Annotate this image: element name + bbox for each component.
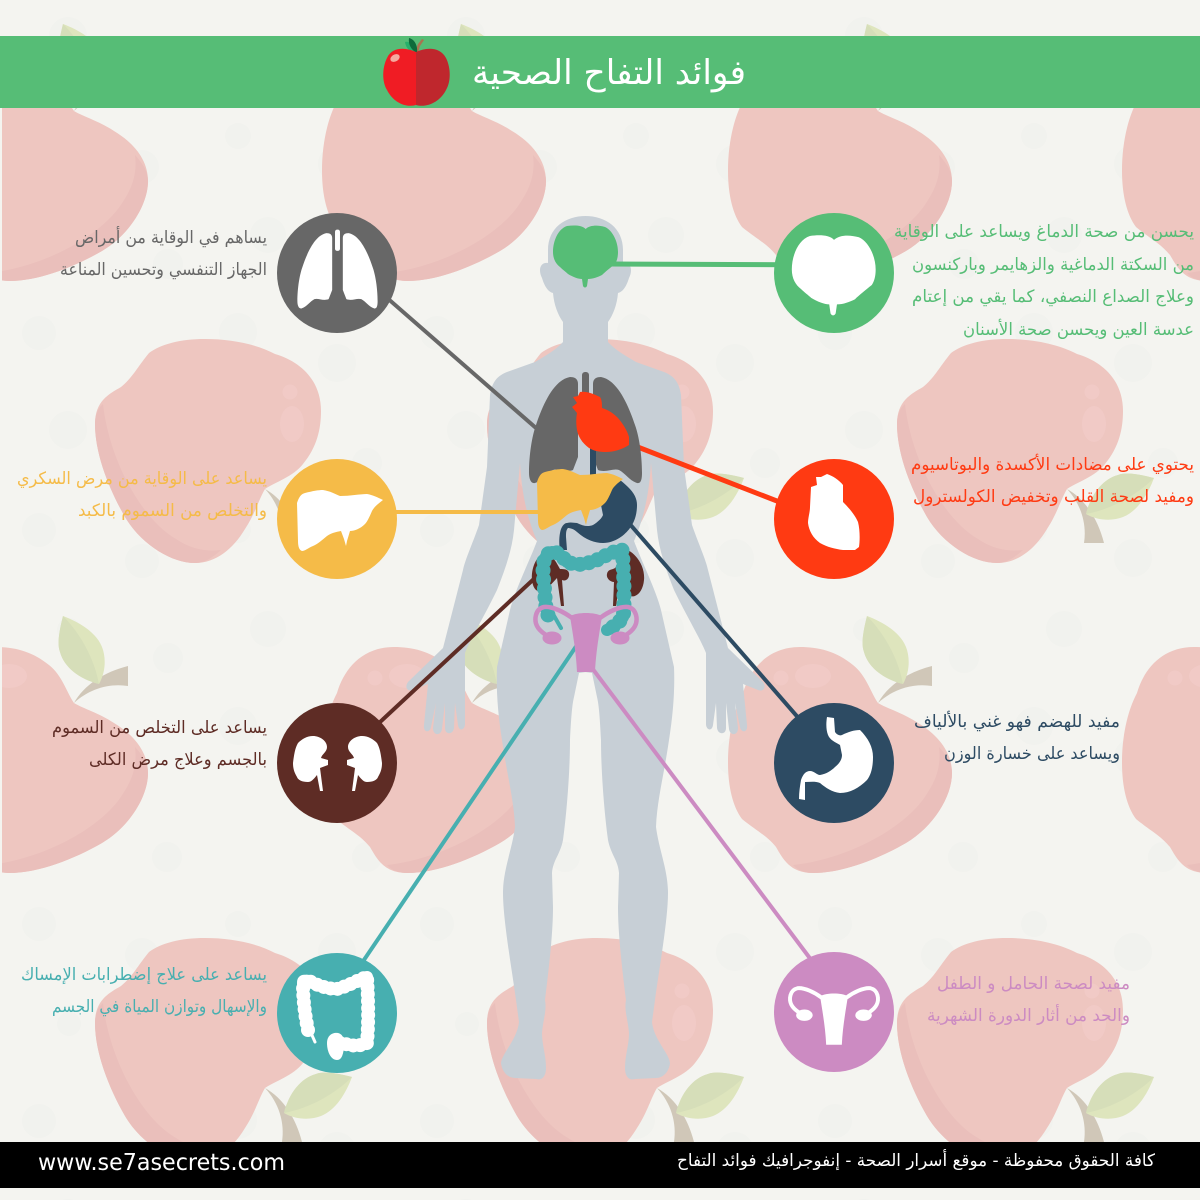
organ: lungs	[529, 372, 642, 483]
text: lungs: يساهم في الوقاية من أمراض	[75, 226, 267, 248]
text: lungs: الجهاز التنفسي وتحسين المناعة	[60, 260, 267, 280]
human body silhouette	[406, 216, 765, 1079]
icon: kidneys	[277, 703, 397, 823]
panel: colon benefit	[21, 953, 397, 1073]
panel: liver benefit	[17, 459, 397, 579]
icon: stomach	[774, 703, 894, 823]
connector: heart	[625, 442, 800, 510]
organ: kidneys	[532, 550, 644, 606]
text: heart: يحتوي على مضادات الأكسدة والبوتاسيوم	[911, 454, 1194, 475]
icon: lungs	[277, 213, 397, 333]
footer credits: كافة الحقوق محفوظة - موقع أسرار الصحة - إنفوجرافيك فوائد التفاح	[677, 1149, 1156, 1171]
organ: colon	[543, 550, 624, 630]
panel: lungs benefit	[60, 213, 397, 333]
panel: stomach benefit	[774, 703, 1120, 823]
text: heart: ومفيد لصحة القلب وتخفيض الكولسترول	[913, 487, 1194, 507]
text: lungs	[60, 226, 267, 280]
text: stomach: مفيد للهضم فهو غني بالألياف	[914, 711, 1120, 732]
text: colon: والإسهال وتوازن المياة في الجسم	[52, 997, 267, 1017]
connector: colon	[347, 645, 577, 985]
organ: heart	[572, 392, 629, 452]
text: liver	[17, 469, 267, 521]
connector: lungs	[370, 283, 536, 428]
organ: stomach	[559, 480, 637, 550]
text: stomach	[914, 711, 1120, 764]
organ: uterus	[535, 607, 637, 672]
panel: uterus benefit	[774, 952, 1130, 1072]
text: kidneys: يساعد على التخلص من السموم	[52, 718, 267, 738]
icon: liver	[277, 459, 397, 579]
text: liver: يساعد على الوقاية من مرض السكري	[17, 469, 267, 489]
text: brain: عدسة العين ويحسن صحة الأسنان	[963, 319, 1194, 340]
text: brain: يحسن من صحة الدماغ ويساعد على الوقاية	[894, 222, 1194, 242]
text: brain	[894, 222, 1194, 340]
icon: colon	[277, 953, 397, 1073]
text: heart	[911, 454, 1194, 507]
text: uterus: مفيد لصحة الحامل و الطفل	[937, 974, 1130, 994]
icon: heart	[774, 459, 894, 579]
connector: kidneys	[350, 577, 536, 750]
text: colon	[21, 965, 267, 1017]
text: uterus	[927, 974, 1130, 1026]
organs inside the body	[529, 225, 644, 672]
text: kidneys: بالجسم وعلاج مرض الكلى	[89, 750, 267, 770]
connector: liver	[337, 510, 545, 514]
icon: uterus	[774, 952, 894, 1072]
icon: red apple	[383, 38, 450, 106]
connector: uterus	[592, 668, 830, 985]
text: stomach: ويساعد على خسارة الوزن	[944, 744, 1120, 764]
header band	[0, 36, 1200, 108]
panel: heart benefit	[774, 454, 1194, 579]
text: brain: من السكتة الدماغية والزهايمر وباركنسون	[912, 255, 1194, 275]
title: فوائد التفاح الصحية	[472, 53, 746, 93]
footer website: www.se7asecrets.com	[38, 1150, 285, 1176]
text: uterus: والحد من أثار الدورة الشهرية	[927, 1004, 1130, 1026]
footer bar	[0, 1142, 1200, 1188]
organ: brain	[553, 225, 618, 288]
text: colon: يساعد على علاج إضطرابات الإمساك	[21, 965, 267, 985]
connector: brain	[610, 264, 834, 265]
text: liver: والتخلص من السموم بالكبد	[78, 501, 267, 521]
organ: esophagus	[590, 448, 596, 478]
organ: liver	[537, 469, 623, 530]
panel: brain benefit	[774, 213, 1194, 340]
connector: stomach	[628, 522, 815, 737]
text: brain: وعلاج الصداع النصفي، كما يقي من إعتام	[912, 287, 1194, 307]
panel: kidneys benefit	[52, 703, 397, 823]
icon: brain	[774, 213, 894, 333]
text: kidneys	[52, 718, 267, 770]
